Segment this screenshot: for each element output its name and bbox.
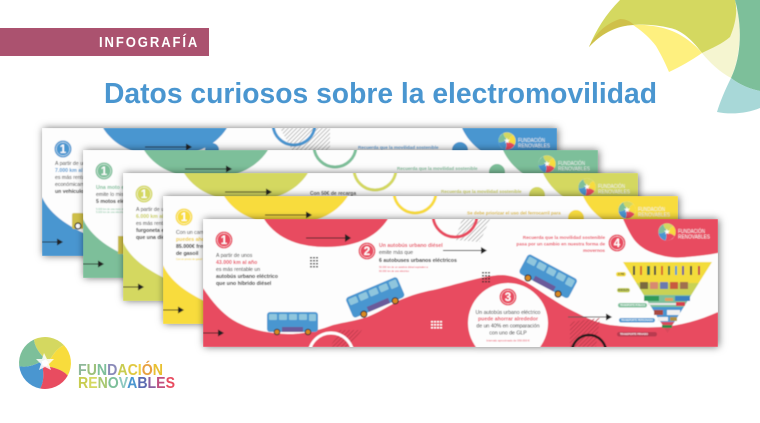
panel: blue card: 7.000 km al año bbox=[55, 168, 93, 174]
ring: bottom black bbox=[570, 317, 608, 347]
panel: yellow card: Con un camión eléctrico bbox=[176, 230, 232, 236]
panel: lime card: 1 bbox=[141, 189, 148, 201]
icon: bus downhill bbox=[518, 254, 578, 298]
logo: Fundación Renovables: FUNDACIÓN bbox=[78, 360, 163, 379]
item 1 bbox=[216, 232, 278, 287]
panel: yellow card: puedes ahorrar bbox=[176, 237, 214, 243]
panel: yellow card: 85.000€ frente a uno bbox=[176, 244, 226, 250]
panel: yellow card: de gasoil bbox=[176, 251, 199, 257]
funnel labels: A PIE bbox=[618, 273, 625, 276]
item 1: 1 bbox=[221, 235, 228, 247]
vehicle icons bbox=[644, 296, 690, 328]
panel: red card bbox=[198, 214, 724, 353]
panel: green card: Una moto eléctrica bbox=[96, 185, 143, 191]
dot grid dark right bbox=[482, 272, 490, 282]
item 4: 4 bbox=[614, 238, 621, 250]
funnel labels: TRANSPORTE PÚBLICO bbox=[620, 304, 645, 307]
arrow: left bottom bbox=[203, 330, 224, 336]
panel: lime card: Con 50€ de recarga bbox=[310, 191, 356, 197]
card logo: RENOVABLES bbox=[678, 234, 710, 240]
panel: lime card: que una diésel bbox=[136, 235, 173, 241]
white circle 3 bbox=[467, 282, 549, 347]
panel: yellow card: Con un precio de gasoil bbox=[176, 258, 203, 261]
dot grid white bbox=[431, 321, 442, 328]
item 2: 6 autobuses urbanos eléctricos bbox=[379, 258, 457, 264]
item 4: pasa por un cambio en nuestra forma de bbox=[516, 242, 605, 246]
panel: green card: FUNDACIÓN bbox=[558, 160, 585, 167]
item 3: 3 bbox=[505, 292, 511, 304]
panel: blue card: un vehículo eléctrico bbox=[55, 189, 107, 195]
funnel labels: TRANSPORTE PERSONADO bbox=[621, 319, 653, 322]
item 3: puede ahorrar alrededor bbox=[478, 316, 538, 322]
panel: blue card: Recuerda que la movilidad sostenible bbox=[358, 145, 439, 150]
item 4: movernos bbox=[583, 248, 605, 253]
item 2: emite más que bbox=[379, 250, 413, 256]
panel: blue card: 1 bbox=[60, 144, 67, 156]
panel: blue card: RENOVABLES bbox=[518, 144, 550, 150]
item 3: con uno de GLP bbox=[489, 330, 527, 336]
item 4: Recuerda que la movilidad sostenible bbox=[523, 235, 605, 240]
panel: blue card: es más rentable bbox=[55, 175, 92, 181]
item 3 bbox=[476, 288, 541, 342]
dot grid dark bbox=[310, 257, 318, 268]
item 2: 60.000 km de uno eléctrico bbox=[379, 270, 410, 273]
icon: bus flat bbox=[267, 312, 318, 335]
item 2: 2 bbox=[364, 246, 370, 258]
logo: Fundación Renovables: RENOVABLES bbox=[78, 375, 175, 392]
item 3: Un autobús urbano eléctrico bbox=[476, 310, 541, 316]
logo: Fundación Renovables bbox=[16, 329, 175, 397]
item 2: Un autobús urbano diésel bbox=[379, 243, 443, 249]
funnel labels: TRANSPORTE PRIVADO bbox=[620, 333, 648, 336]
item 3: de un 40% en comparación bbox=[476, 324, 540, 330]
arrow: top bbox=[306, 234, 351, 242]
ring: bottom white bbox=[308, 330, 362, 347]
panel: blue card bbox=[42, 103, 557, 256]
funnel pyramid bbox=[623, 262, 712, 333]
panel: green card bbox=[83, 125, 598, 278]
red wave bbox=[203, 275, 718, 347]
funnel labels bbox=[616, 272, 657, 336]
panel: lime card: A partir de unos bbox=[136, 207, 173, 213]
title: Datos curiosos sobre la electromovilidad bbox=[104, 78, 657, 110]
ring: top bbox=[431, 219, 490, 242]
panel: blue card: A partir de unos bbox=[55, 161, 92, 167]
panel: green card: 5.000 km de una moto de gasolina bbox=[96, 208, 135, 211]
banner: INFOGRAFÍA bbox=[0, 28, 209, 56]
panel: yellow card bbox=[163, 171, 678, 324]
panel: blue card: FUNDACIÓN bbox=[518, 137, 545, 144]
funnel labels: EN BICICLETA bbox=[618, 289, 629, 292]
panel: lime card: 6.000 km al año bbox=[136, 214, 174, 220]
item 2: 50.000 km de un autobús diésel equivalen a bbox=[379, 266, 429, 269]
panel: green card: Recuerda que la movilidad sostenible bbox=[397, 166, 478, 171]
item 2 bbox=[358, 242, 457, 273]
panel: yellow card: RENOVABLES bbox=[638, 212, 670, 218]
panel: green card: 5.000 km de una eléctrica bbox=[96, 211, 125, 214]
item 1: es más rentable un bbox=[216, 267, 260, 273]
panel: green card: 1 bbox=[101, 166, 108, 178]
panel: lime card: es más rentable una bbox=[136, 221, 183, 227]
panel: blue card: económicamente bbox=[55, 182, 95, 188]
item 1: que uno híbrido diésel bbox=[216, 281, 272, 287]
card logo bbox=[658, 222, 710, 242]
top right red shape bbox=[623, 219, 718, 258]
panel: yellow card: Se debe priorizar el uso del ferrocarril para bbox=[467, 210, 561, 216]
people icons bbox=[633, 266, 700, 275]
panel: lime card: Recuerda que la movilidad sostenible bbox=[441, 189, 522, 194]
panel: green card: emite lo mismo que bbox=[96, 192, 141, 198]
panel: lime card: RENOVABLES bbox=[598, 190, 630, 196]
banner: INFOGRAFÍA: INFOGRAFÍA bbox=[99, 33, 199, 50]
panel: lime card bbox=[123, 148, 638, 301]
item 1: autobús urbano eléctrico bbox=[216, 274, 278, 280]
panel: yellow card: 1 bbox=[181, 212, 188, 224]
panel: green card: 5 motos eléctricas bbox=[96, 199, 141, 205]
item 4 bbox=[516, 234, 626, 253]
panel: lime card: furgoneta eléctrica bbox=[136, 228, 183, 234]
item 3: Intervalo aproximado de 350.000 € bbox=[486, 338, 530, 342]
panel: lime card: FUNDACIÓN bbox=[598, 183, 625, 190]
item 1: A partir de unos bbox=[216, 253, 253, 259]
panel: green card: RENOVABLES bbox=[558, 166, 590, 172]
bicycle icons bbox=[640, 282, 688, 289]
card logo: FUNDACIÓN bbox=[678, 228, 705, 235]
item 1: 43.000 km al año bbox=[216, 260, 257, 266]
arrow: funnel bbox=[568, 314, 612, 320]
arrow: right bbox=[443, 247, 487, 254]
panel: yellow card: FUNDACIÓN bbox=[638, 206, 665, 213]
decorative corner shapes bbox=[589, 0, 760, 113]
icon: bus uphill bbox=[345, 276, 407, 321]
top red arc bbox=[264, 219, 388, 247]
